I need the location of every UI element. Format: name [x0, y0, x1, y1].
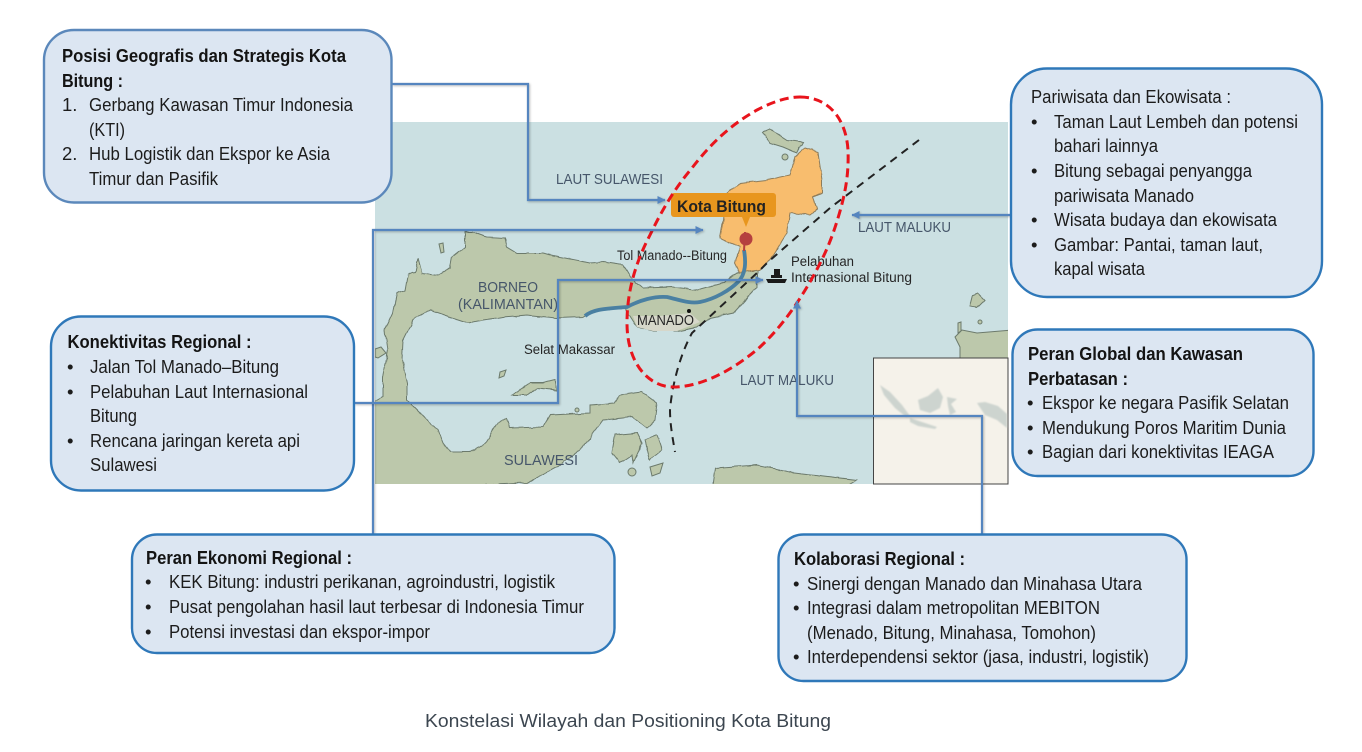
bullet list: • — [1027, 392, 1033, 413]
arrow: geography box to Kota Bitung — [392, 84, 665, 200]
bullet list: • — [793, 597, 799, 618]
map labels: LAUT SULAWESI — [556, 171, 663, 188]
bullet list: Potensi investasi dan ekspor-impor — [169, 621, 430, 642]
bullet list: Interdependensi sektor (jasa, industri, logistik) — [807, 646, 1149, 667]
heading: Bitung : — [62, 70, 123, 91]
bullet list: Mendukung Poros Maritim Dunia — [1042, 417, 1287, 438]
bullet list: • — [1031, 234, 1037, 255]
bullet list: Ekspor ke negara Pasifik Selatan — [1042, 392, 1289, 413]
bullet list: Gambar: Pantai, taman laut, — [1054, 234, 1263, 255]
panel: pariwisata dan ekowisata — [1011, 68, 1322, 297]
Kota Bitung label: Kota Bitung — [677, 197, 766, 216]
highlight ellipse — [627, 97, 848, 387]
arrow: tourism box to map — [852, 214, 1011, 216]
map labels: LAUT MALUKU — [858, 219, 951, 236]
heading: Peran Global dan Kawasan — [1028, 343, 1243, 364]
map labels: LAUT MALUKU — [740, 372, 834, 389]
bullet list: • — [67, 356, 73, 377]
heading: Kolaborasi Regional : — [794, 548, 965, 569]
shipping route dashed line — [670, 140, 919, 452]
heading: Posisi Geografis dan Strategis Kota — [62, 45, 347, 66]
numbered list: 1. — [62, 94, 77, 115]
bullet list: • — [67, 381, 73, 402]
bullet list: • — [1027, 417, 1033, 438]
map labels: BORNEO — [478, 279, 538, 296]
bullet list: bahari lainnya — [1054, 135, 1159, 156]
bullet list: Jalan Tol Manado–Bitung — [90, 356, 279, 377]
bullet list — [67, 356, 308, 475]
heading: Pariwisata dan Ekowisata : — [1031, 86, 1231, 107]
heading — [1028, 343, 1243, 389]
map labels: Internasional Bitung — [791, 270, 912, 285]
bullet list — [145, 571, 584, 642]
arrow: connectivity box to port — [354, 280, 763, 403]
numbered list: Hub Logistik dan Ekspor ke Asia — [89, 143, 331, 164]
numbered list: 2. — [62, 143, 77, 164]
bullet list: • — [1031, 160, 1037, 181]
map sea background — [375, 122, 1008, 484]
numbered list — [62, 94, 354, 189]
bullet list — [1027, 392, 1289, 462]
panel: kolaborasi regional — [778, 534, 1186, 681]
numbered list: (KTI) — [89, 119, 125, 140]
landmass: Borneo and Sulawesi — [370, 232, 757, 490]
map labels: Pelabuhan — [791, 254, 854, 269]
Bitung location pin — [740, 232, 752, 251]
bullet list: Pelabuhan Laut Internasional — [90, 381, 308, 402]
bullet list: Pusat pengolahan hasil laut terbesar di Indonesia Timur — [169, 596, 584, 617]
arrow: economy box to Kota Bitung — [373, 230, 703, 534]
bullet list: • — [1031, 111, 1037, 132]
bullet list: Bitung — [90, 405, 137, 426]
panel: peran global — [1012, 330, 1314, 476]
bullet list: • — [145, 621, 151, 642]
bullet list: kapal wisata — [1054, 258, 1146, 279]
bullet list: Bitung sebagai penyangga — [1054, 160, 1253, 181]
map labels: SULAWESI — [504, 452, 578, 469]
numbered list: Timur dan Pasifik — [89, 168, 219, 189]
panel: konektivitas regional — [51, 316, 354, 490]
map labels: MANADO — [637, 313, 694, 329]
bullet list — [1031, 111, 1298, 279]
toll road — [585, 250, 745, 316]
heading: Konektivitas Regional : — [68, 331, 252, 352]
panel: posisi geografis — [44, 30, 392, 202]
numbered list: Gerbang Kawasan Timur Indonesia — [89, 94, 354, 115]
map inset: Indonesia — [874, 358, 1008, 484]
map labels: (KALIMANTAN) — [458, 296, 558, 313]
panel: peran ekonomi regional — [132, 534, 614, 653]
icon: port ship — [766, 269, 787, 283]
bullet list: Rencana jaringan kereta api — [90, 430, 300, 451]
bullet list: KEK Bitung: industri perikanan, agroindustri, logistik — [169, 571, 556, 592]
bullet list: Sinergi dengan Manado dan Minahasa Utara — [807, 573, 1143, 594]
bullet list: pariwisata Manado — [1054, 185, 1194, 206]
Kota Bitung highlighted region — [720, 148, 822, 273]
bullet list: Wisata budaya dan ekowisata — [1054, 209, 1278, 230]
heading — [62, 45, 347, 91]
Manado urban patch — [633, 313, 700, 331]
bullet list: • — [145, 596, 151, 617]
map — [370, 97, 1012, 490]
bullet list: • — [793, 573, 799, 594]
caption: Konstelasi Wilayah dan Positioning Kota Bitung — [425, 711, 831, 731]
bullet list: Taman Laut Lembeh dan potensi — [1054, 111, 1298, 132]
bullet list: (Menado, Bitung, Minahasa, Tomohon) — [807, 622, 1096, 643]
arrow: collaboration box to map — [797, 301, 982, 534]
bullet list: Bagian dari konektivitas IEAGA — [1042, 441, 1275, 462]
map labels — [458, 171, 951, 469]
bullet list: • — [145, 571, 151, 592]
bullet list: • — [793, 646, 799, 667]
small islands — [375, 129, 1012, 490]
Kota Bitung label — [671, 193, 776, 227]
bullet list: • — [67, 430, 73, 451]
heading: Perbatasan : — [1028, 368, 1128, 389]
bullet list: • — [1027, 441, 1033, 462]
bullet list — [793, 573, 1149, 667]
heading: Peran Ekonomi Regional : — [146, 547, 352, 568]
bullet list: • — [1031, 209, 1037, 230]
bullet list: Sulawesi — [90, 454, 157, 475]
map labels: Selat Makassar — [524, 342, 615, 357]
bullet list: Integrasi dalam metropolitan MEBITON — [807, 597, 1100, 618]
map labels: Tol Manado--Bitung — [617, 248, 727, 263]
